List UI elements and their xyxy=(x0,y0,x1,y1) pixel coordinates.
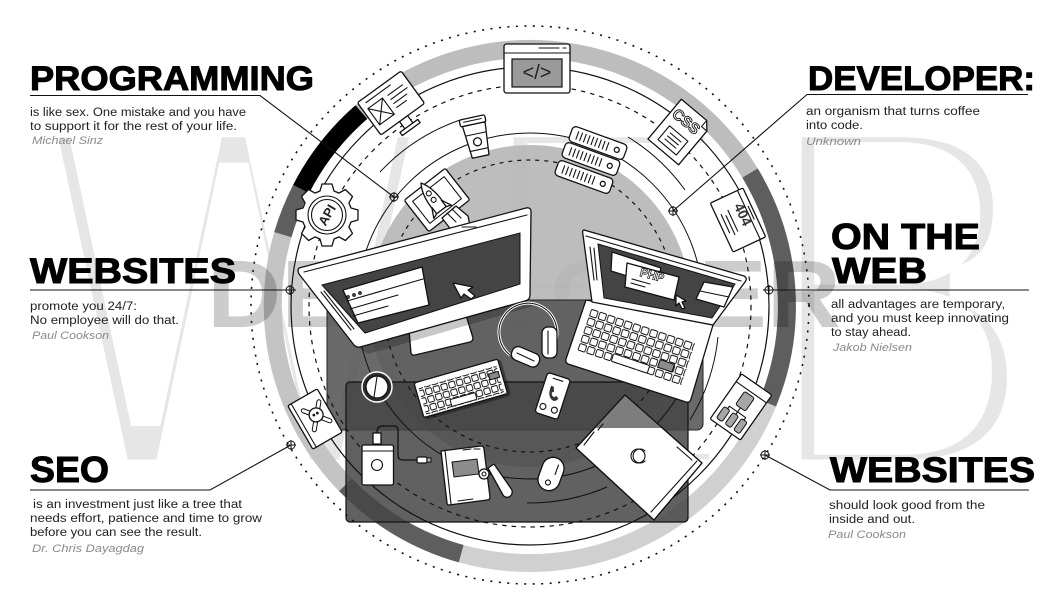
heading block: PROGRAMMING: to support it for the rest of your life. xyxy=(30,121,237,133)
round knob xyxy=(362,372,392,402)
heading block: ON THE WEB: all advantages are temporary, xyxy=(831,299,1005,311)
heading block: SEO: before you can see the result. xyxy=(30,527,202,539)
heading block: WEBSITES left: Paul Cookson xyxy=(32,330,109,342)
icon: code window: </> xyxy=(523,62,551,84)
closed laptop xyxy=(576,395,702,520)
heading block: WEBSITES right: Paul Cookson xyxy=(828,529,906,541)
heading block: WEBSITES left: WEBSITES xyxy=(30,252,236,291)
computer mouse xyxy=(535,454,567,494)
smartphone xyxy=(535,372,571,420)
heading block: PROGRAMMING: PROGRAMMING xyxy=(30,60,314,98)
heading block: SEO: is an investment just like a tree that xyxy=(33,499,243,511)
icon: 404 page xyxy=(710,188,766,252)
notebook and pencil xyxy=(441,446,512,505)
segmented outer ring xyxy=(273,49,787,563)
icon: wireframe monitor xyxy=(357,71,432,146)
heading block: PROGRAMMING xyxy=(30,60,394,197)
heading block: DEVELOPER: into code. xyxy=(806,120,863,132)
icon: coffee cup xyxy=(459,115,493,159)
background ghost lettering: WEB: W xyxy=(25,22,442,593)
heading block: DEVELOPER: DEVELOPER: xyxy=(808,60,1035,98)
heading block: WEBSITES left: No employee will do that. xyxy=(30,315,179,327)
heading block: ON THE WEB: Jakob Nielsen xyxy=(832,342,912,354)
laptop side panels xyxy=(696,282,733,307)
icon: 404 page: 404 xyxy=(731,200,755,228)
PHP window: PHP xyxy=(638,265,666,285)
laptop base with keyboard xyxy=(566,300,713,402)
icon: skull book xyxy=(288,389,342,449)
PHP window xyxy=(625,263,679,300)
monitor window xyxy=(343,267,429,323)
monitor stand xyxy=(409,315,473,355)
icon: CSS file: CSS xyxy=(669,105,703,138)
icon: API gear xyxy=(296,184,358,246)
callout crosshairs xyxy=(285,192,774,460)
mouse cursor xyxy=(453,283,475,299)
icon: flowchart page xyxy=(710,374,772,440)
PHP window back xyxy=(611,252,661,285)
heading block: ON THE WEB: to stay ahead. xyxy=(831,327,911,339)
central gray disc xyxy=(369,145,691,467)
heading block: ON THE WEB: ON THE xyxy=(831,216,980,257)
heading block: ON THE WEB: WEB xyxy=(832,250,927,291)
desk mat: lower xyxy=(346,382,688,522)
heading block: ON THE WEB: and you must keep innovating xyxy=(831,313,1009,325)
heading block: PROGRAMMING: is like sex. One mistake and you have xyxy=(30,107,246,119)
icon: rocket tablet with hand xyxy=(404,168,470,232)
heading block: WEBSITES left: promote you 24/7: xyxy=(30,301,137,313)
desk mat: upper xyxy=(327,300,703,430)
icon: code window xyxy=(504,44,570,93)
heading block: PROGRAMMING: Michael Sinz xyxy=(32,135,104,147)
background ghost word: DEVELOPER: DEVELOPER xyxy=(207,241,841,348)
laptop xyxy=(566,230,746,402)
icon: server stack xyxy=(554,126,628,194)
small keyboard xyxy=(414,358,511,420)
heading block: SEO: SEO xyxy=(30,449,109,490)
heading block: DEVELOPER xyxy=(673,60,1035,211)
heading block: ON THE WEB xyxy=(763,216,1029,354)
heading block: SEO: Dr. Chris Dayagdag xyxy=(32,543,145,555)
laptop lid xyxy=(583,230,746,325)
headphones xyxy=(499,303,557,369)
background ghost lettering: WEB: E xyxy=(448,22,758,593)
heading block: DEVELOPER: Unknown xyxy=(806,136,861,148)
heading block: WEBSITES right: WEBSITES xyxy=(830,451,1035,490)
heading block: DEVELOPER: an organism that turns coffee xyxy=(806,106,980,118)
heading block: SEO xyxy=(30,445,291,555)
heading block: WEBSITES right xyxy=(765,451,1035,541)
desktop monitor xyxy=(298,208,533,354)
icon: CSS file xyxy=(648,99,712,165)
icon: API gear: API xyxy=(315,202,339,228)
concentric guide circles xyxy=(251,26,809,584)
heading block: WEBSITES right: should look good from the xyxy=(829,500,985,512)
external hard drive and cable xyxy=(362,426,431,485)
heading block: SEO: needs effort, patience and time to grow xyxy=(30,513,263,525)
laptop cursor xyxy=(676,295,686,309)
heading block: WEBSITES right: inside and out. xyxy=(829,514,915,526)
heading block: WEBSITES left xyxy=(30,252,296,342)
